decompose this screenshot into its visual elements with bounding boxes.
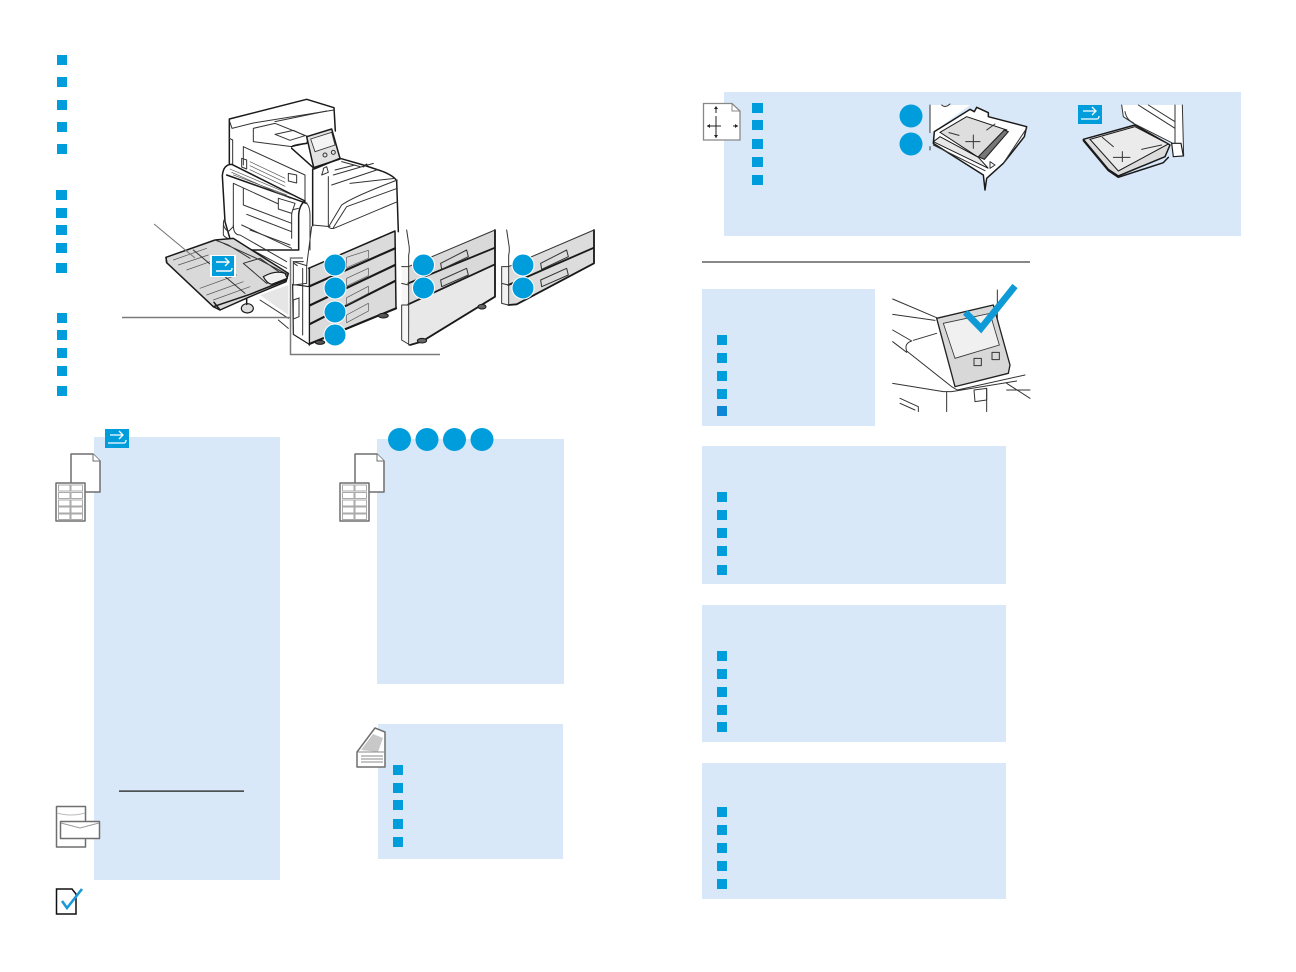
- list markers: paper size panel: [752, 103, 763, 185]
- caster: [241, 299, 253, 313]
- illustration: paper tray tower two and three: [402, 230, 594, 345]
- icon: two-sided page: [357, 728, 385, 767]
- icon: document check: [56, 889, 82, 914]
- illustration: control panel with check mark: [893, 286, 1030, 412]
- control panel: [307, 129, 340, 169]
- side cover: [293, 284, 309, 344]
- body fill: [222, 99, 398, 238]
- leader lines: [122, 224, 440, 354]
- tower three: [508, 230, 594, 305]
- panel: control panel settings: [702, 289, 875, 426]
- numbered circles: tray row above panel: [388, 428, 494, 451]
- right front body: [313, 158, 398, 232]
- numbered circles: tray loading: [900, 104, 922, 156]
- panel: instructions three: [702, 763, 1006, 899]
- list markers: instructions two: [717, 651, 727, 732]
- panel: bypass tray paper types: [94, 437, 280, 880]
- divider rule: [702, 262, 1030, 263]
- inner door area above tray: [223, 225, 292, 268]
- list markers: instructions three: [717, 807, 727, 889]
- numbered circles: main tray: [324, 254, 346, 346]
- list markers: two-sided panel: [393, 765, 403, 847]
- check mark: [965, 286, 1015, 328]
- icon: bypass tray badge on printer: [210, 255, 236, 277]
- list markers: control panel settings: [717, 335, 727, 416]
- illustration: bypass tray loaded: [1083, 105, 1184, 177]
- panel: paper size loading: [724, 92, 1241, 236]
- numbered circles: tower two: [412, 254, 434, 299]
- divider inside bypass panel: [119, 790, 244, 792]
- panel: two-sided printing: [378, 724, 563, 859]
- side door: [222, 164, 305, 250]
- illustration: printer upper body: [222, 99, 398, 250]
- icon: page and label sheet, right: [340, 454, 384, 521]
- floor shade: [260, 285, 288, 315]
- bypass tray: [166, 238, 288, 310]
- icon: envelopes: [56, 806, 100, 847]
- list markers: top left group: [57, 55, 67, 154]
- scanner lid: [229, 99, 335, 163]
- icon: bypass tray badge in loading panel: [1078, 105, 1102, 124]
- list markers: lower left group: [57, 313, 67, 396]
- numbered circles: tower three: [512, 254, 534, 299]
- list markers: instructions one: [717, 492, 727, 575]
- front paper trays: [308, 231, 396, 344]
- list markers: middle left group: [56, 190, 67, 273]
- panel: numbered tray paper types: [377, 439, 564, 684]
- icon: bypass tray badge above panel: [105, 429, 129, 448]
- illustration: paper tray drawer: [930, 104, 1027, 190]
- tower two: [408, 230, 495, 303]
- icon: page and label sheet, left: [56, 454, 100, 521]
- panel: instructions one: [702, 446, 1006, 584]
- icon: paper size document: [704, 104, 740, 140]
- panel: instructions two: [702, 605, 1006, 742]
- illustration: printer lower body, bypass tray and trays: [166, 225, 396, 345]
